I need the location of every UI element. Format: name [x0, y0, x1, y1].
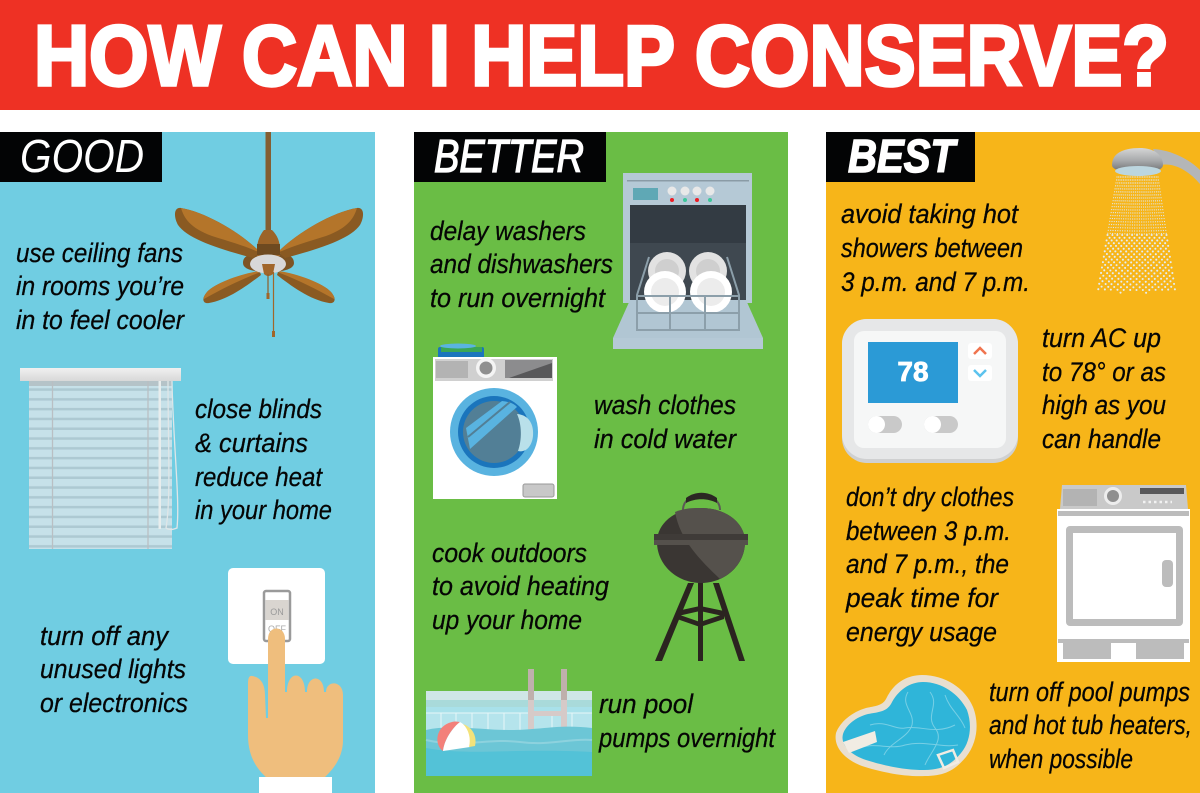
- text: delay washers: to run overnight: [430, 283, 606, 313]
- text: wash clothes: in cold water: [594, 424, 737, 454]
- text: dry clothes: peak time for: [845, 583, 999, 613]
- icon: light switch and hand: [228, 568, 343, 793]
- text: run pool: [598, 689, 776, 753]
- text: turn AC up: turn AC up: [1042, 323, 1161, 353]
- icon: clothes dryer: [1057, 485, 1190, 662]
- text: cook outdoors: [432, 538, 609, 635]
- text: close blinds: & curtains: [195, 428, 308, 458]
- icon: thermostat: [842, 319, 1018, 463]
- heading: best: BEST: [848, 130, 958, 182]
- text: turn AC up: can handle: [1042, 424, 1161, 454]
- text: dry clothes: between 3 p.m.: [846, 516, 1011, 546]
- icon: kettle grill: [654, 493, 748, 661]
- text: dry clothes: energy usage: [846, 617, 997, 647]
- text: pool pumps: [989, 677, 1192, 774]
- icon: kidney pool: [836, 675, 977, 776]
- panel: better: [414, 130, 788, 793]
- text: delay washers: delay washers: [430, 216, 586, 246]
- icon: washing machine: [433, 344, 557, 499]
- text: cook outdoors: to avoid heating: [432, 571, 609, 601]
- text: turn off lights: [40, 621, 188, 718]
- text: ceiling fans: use ceiling fans: [16, 238, 183, 268]
- icon: dishwasher: [613, 173, 763, 349]
- text: dry clothes: don’t dry clothes: [846, 482, 1014, 512]
- text: cook outdoors: up your home: [432, 605, 582, 635]
- text: dry clothes: [845, 482, 1014, 647]
- text: wash clothes: wash clothes: [594, 390, 736, 420]
- text: run pool: run pool: [599, 689, 694, 719]
- text: turn AC up: to 78° or as: [1042, 357, 1166, 387]
- text: close blinds: in your home: [195, 495, 332, 525]
- text: ceiling fans: [16, 238, 185, 335]
- text: turn off lights: unused lights: [40, 654, 186, 684]
- title banner: [0, 0, 1200, 110]
- text: dry clothes: and 7 p.m., the: [846, 549, 1009, 579]
- text: close blinds: [195, 394, 332, 525]
- text: pool pumps: when possible: [989, 744, 1133, 774]
- text: avoid showers: 3 p.m. and 7 p.m.: [841, 267, 1030, 297]
- text: run pool: pumps overnight: [598, 723, 776, 753]
- text: close blinds: close blinds: [195, 394, 322, 424]
- icon: ceiling fan: [175, 132, 363, 337]
- panel: best: [826, 130, 1200, 793]
- icon: window blinds: [20, 368, 181, 549]
- panel: good: [0, 130, 375, 793]
- text: avoid showers: [841, 199, 1030, 297]
- text: delay washers: and dishwashers: [430, 249, 613, 279]
- text: turn AC up: high as you: [1042, 390, 1166, 420]
- icon: light switch and hand: ON: [270, 607, 284, 617]
- text: avoid showers: avoid taking hot: [841, 199, 1019, 229]
- icon: thermostat: 78: [897, 356, 929, 387]
- icon: swimming pool: [426, 669, 592, 776]
- text: turn AC up: [1042, 323, 1166, 454]
- icon: shower head: [1098, 148, 1200, 293]
- text: delay washers: [430, 216, 613, 313]
- text: turn off lights: turn off any: [40, 621, 169, 651]
- text: close blinds: reduce heat: [195, 462, 323, 492]
- text: cook outdoors: cook outdoors: [432, 538, 587, 568]
- icon: light switch and hand: OFF: [268, 624, 286, 634]
- text: avoid showers: showers between: [841, 233, 1023, 263]
- text: ceiling fans: in rooms you’re: [16, 271, 184, 301]
- text: wash clothes: [594, 390, 737, 454]
- text: turn off lights: or electronics: [40, 688, 188, 718]
- heading: better: BETTER: [434, 130, 584, 182]
- heading: good: GOOD: [20, 130, 144, 182]
- text: ceiling fans: in to feel cooler: [16, 305, 185, 335]
